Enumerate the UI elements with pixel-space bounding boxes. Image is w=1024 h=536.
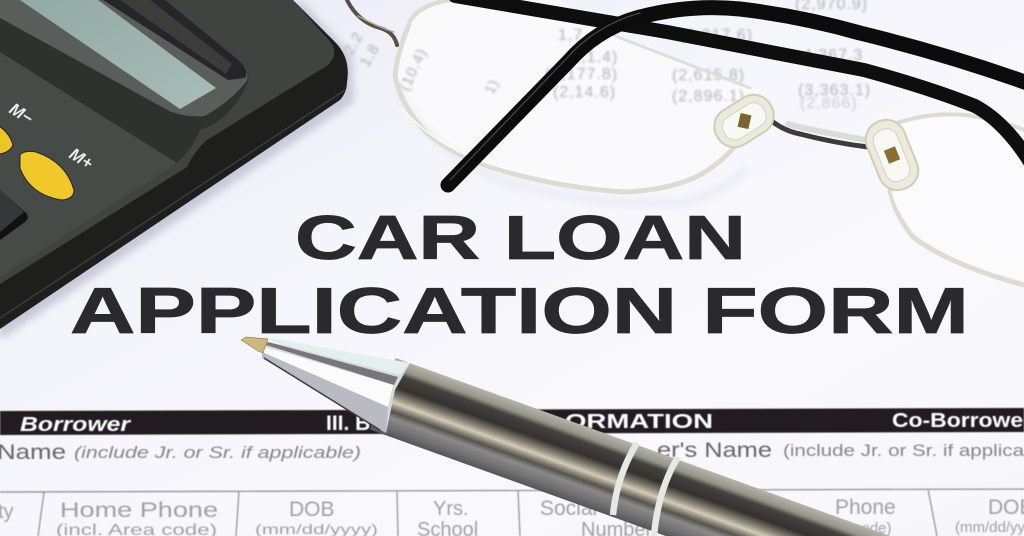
keypad panel: [0, 52, 177, 277]
pen barrel: [370, 358, 894, 536]
bar label: Borrower: Borrower: [20, 414, 132, 436]
blurred financial figures behind glasses: (2,615.8): [672, 67, 745, 84]
name field labels: [0, 439, 1024, 464]
name field labels: (include Jr. or Sr. if applica: [783, 441, 1024, 460]
blurred financial figures behind glasses: (2,317.6): [680, 27, 753, 44]
blurred financial figures behind glasses: (3,363.1): [798, 82, 871, 99]
form table: Yrs.: [433, 498, 469, 520]
blurred financial figures behind glasses: [341, 0, 871, 112]
blurred financial figures behind glasses: 1.8: [357, 41, 383, 70]
pen cone upper highlight: [270, 338, 410, 375]
blurred financial figures behind glasses: (2,14.6): [553, 84, 616, 101]
pen cone white band: [262, 346, 393, 407]
bar label: III.: III. B: [326, 412, 370, 435]
bar label: Co-Borrower: Co-Borrower: [892, 410, 1024, 432]
pen rings: [613, 443, 678, 536]
blurred financial figures behind glasses: (2,866): [800, 95, 858, 112]
button: yellow M+: [20, 151, 74, 200]
heading: APPLICATION FORM: APPLICATION FORM: [70, 274, 969, 347]
pen cone lower band: [262, 352, 388, 433]
blurred financial figures behind glasses: 1,7: [558, 27, 583, 44]
glasses: [347, 0, 1024, 285]
left hinge: [347, 0, 397, 45]
pen nib: [241, 337, 268, 353]
upper temple arm: [448, 8, 1024, 185]
name field labels: (include Jr. or Sr. if applicable): [74, 443, 361, 462]
form table: DOB: [289, 498, 335, 521]
form section bar: [0, 408, 1024, 436]
calculator shadow: [0, 0, 354, 340]
blurred financial figures behind glasses: 4,367.3: [803, 47, 863, 64]
lower temple arm: [455, 0, 1024, 162]
key label: M+: M+: [66, 144, 96, 173]
blurred financial figures behind glasses: (3,177.8): [545, 66, 618, 83]
right lens rim: [897, 114, 1024, 130]
key label: M-: M−: [6, 99, 36, 128]
blurred financial figures behind glasses: (10.4): [396, 46, 431, 94]
bar label: information: ORMATION: [565, 411, 713, 433]
left lens rim: [395, 1, 734, 192]
blurred financial figures behind glasses: (2,896.1): [672, 88, 745, 105]
lens tint: left lens: [395, 0, 759, 192]
glasses shadow: [400, 95, 745, 204]
heading: CAR LOAN: CAR LOAN: [295, 204, 746, 273]
form table: Home Phone: [60, 499, 218, 522]
ballpoint pen: [241, 337, 894, 536]
right nose pad: [860, 114, 924, 196]
display screen: [20, 0, 216, 109]
left nose pad: [707, 88, 781, 154]
blurred financial figures behind glasses: 1): [481, 76, 502, 96]
blurred financial figures behind glasses: 2.2: [341, 29, 367, 58]
display bezel: [0, 0, 247, 116]
display slit: [103, 0, 246, 80]
pen cone: [262, 342, 410, 433]
form table: Phone: [835, 496, 896, 519]
lens tint: right lens: [890, 114, 1024, 286]
form table: Social: [540, 497, 597, 520]
name field labels: er's Name: [657, 439, 772, 462]
calculator bevel: [0, 90, 345, 318]
pen cone dark streak: [266, 342, 398, 385]
form table: [0, 489, 1024, 536]
blurred financial figures behind glasses: (1,1.4): [565, 49, 618, 66]
pen cone lower edge: [264, 358, 380, 430]
bridge: [773, 122, 868, 147]
calculator: [0, 0, 354, 340]
button: dark key: [0, 190, 28, 240]
calculator face: [0, 0, 334, 284]
calculator outer shell: [0, 0, 348, 329]
button: yellow M-: [0, 122, 13, 154]
